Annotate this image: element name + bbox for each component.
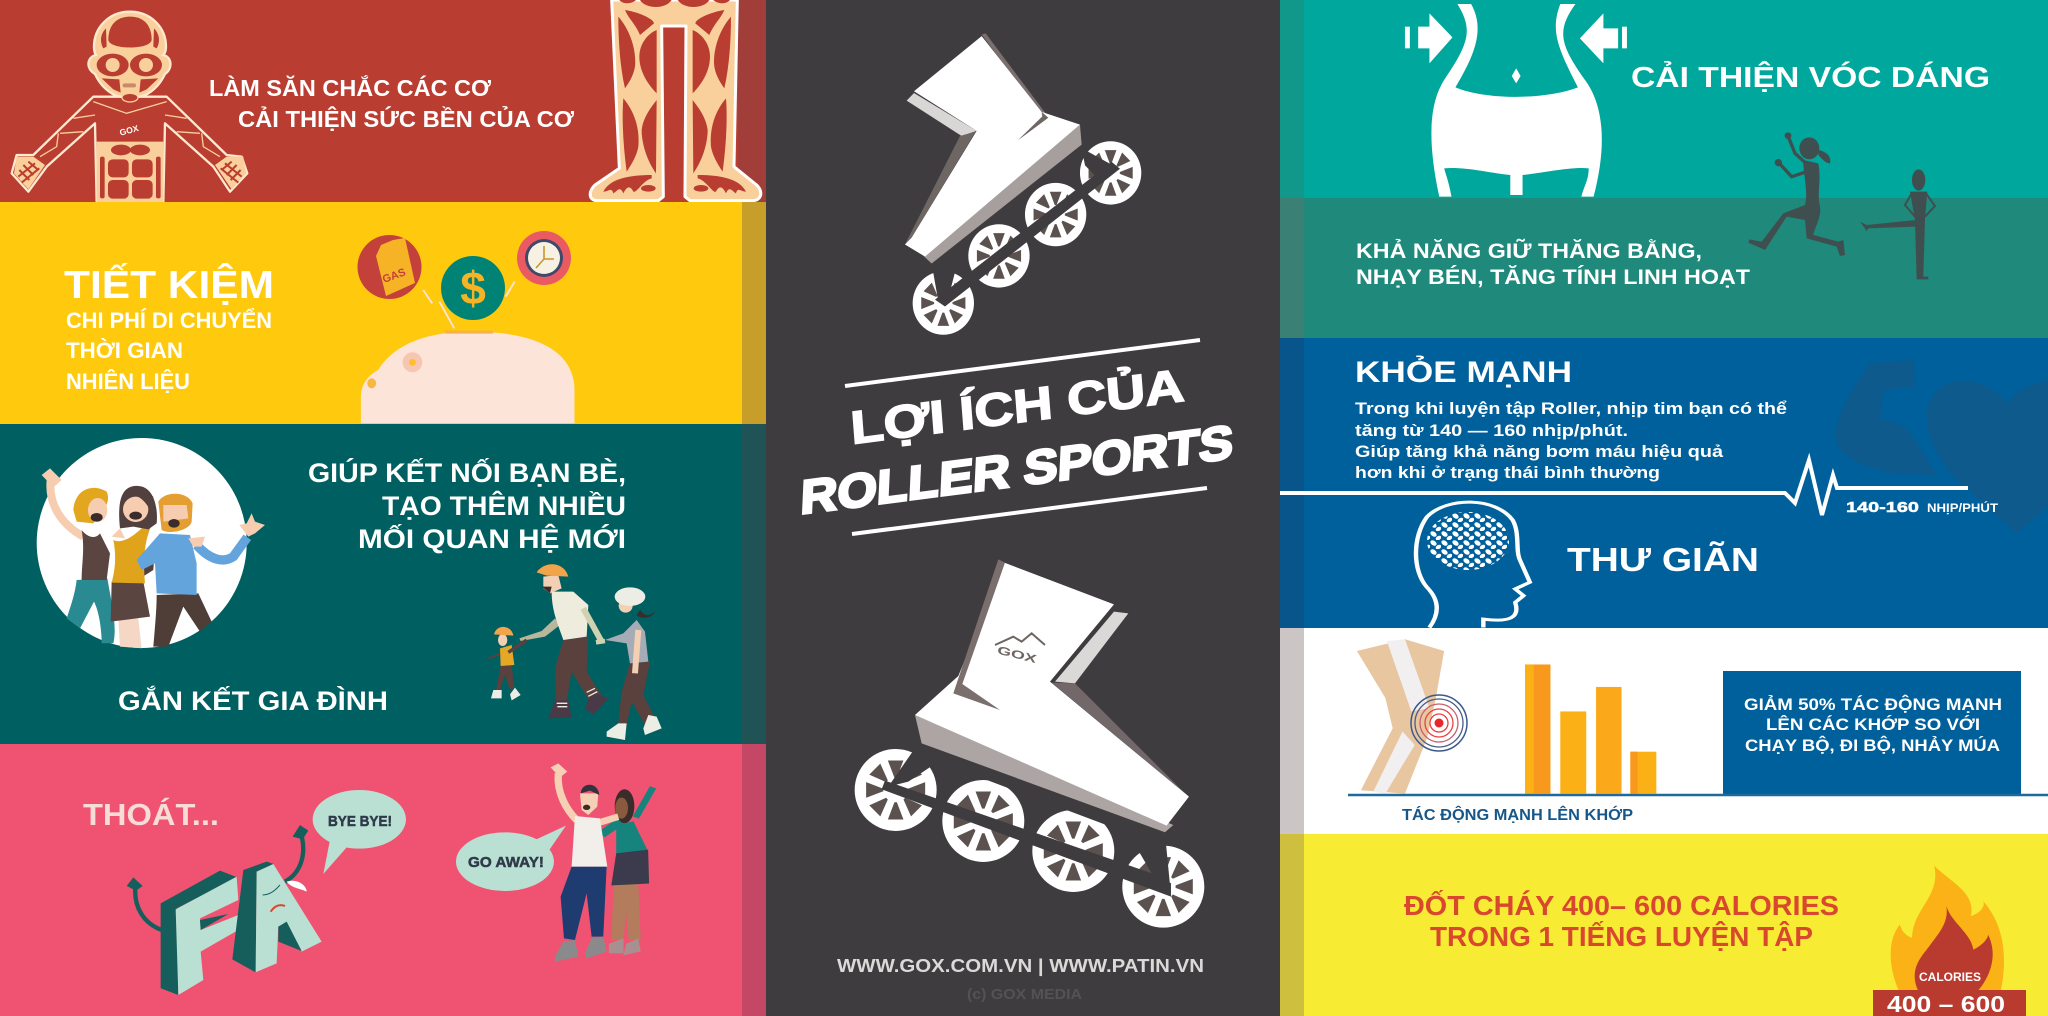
icon: bottom roller skate: GOX <box>996 645 1038 666</box>
text: muscle benefits: LÀM SĂN CHẮC CÁC CƠ <box>209 74 491 101</box>
text: heart rate label <box>1846 499 1999 516</box>
text: heart rate paragraph: Trong khi luyện tập Roller, nhịp tim bạn có thể <box>1355 399 1788 418</box>
heading: savings: TIẾT KIỆM <box>64 263 274 307</box>
text: heart rate label: 140-160 <box>1846 499 1919 516</box>
icon: muscular body figure <box>12 12 247 202</box>
icon: piggy bank <box>361 282 574 423</box>
text: balance <box>1356 239 1750 289</box>
icon: muscular body figure: GOX <box>118 123 140 138</box>
text: savings list: NHIÊN LIỆU <box>66 369 190 394</box>
icon: dollar coin: $ <box>460 262 486 314</box>
icon: exercising silhouettes <box>1748 132 1935 279</box>
text: calories burned <box>1404 889 1839 952</box>
icon: clock <box>517 231 571 285</box>
panel: title column (dark center) <box>766 0 1280 1016</box>
panel: health and relax (blue band) <box>1280 338 2048 628</box>
icon: waist with arrows <box>1405 4 1627 197</box>
panel: connecting people (dark teal band) <box>0 424 766 744</box>
text: savings list: CHI PHÍ DI CHUYỂN <box>66 308 272 333</box>
icon: gas can <box>358 235 422 299</box>
bar chart: impact <box>1525 664 1656 794</box>
text: heart rate paragraph <box>1355 399 1788 482</box>
icon: FA character <box>127 825 322 995</box>
callout: GO AWAY: GO AWAY! <box>468 854 544 871</box>
callout box: joint impact: GIẢM 50% TÁC ĐỘNG MẠNH <box>1744 695 2002 714</box>
callout: BYE BYE <box>313 790 406 874</box>
text: calories burned: ĐỐT CHÁY 400– 600 CALORIES <box>1404 889 1839 921</box>
heading: healthy: KHỎE MẠNH <box>1355 355 1572 389</box>
panel: body shape (teal band) <box>1280 0 2048 198</box>
heading: body shape: CẢI THIỆN VÓC DÁNG <box>1631 60 1990 94</box>
icon: brain <box>1427 512 1509 570</box>
text: savings list <box>66 308 272 394</box>
text: connect friends: TẠO THÊM NHIỀU <box>382 490 626 521</box>
heading: relax: THƯ GIÃN <box>1567 541 1759 578</box>
title decoration and heading <box>799 340 1234 534</box>
text: copyright: (c) GOX MEDIA <box>967 986 1082 1003</box>
panel: escape singledom (pink band) <box>0 744 766 1016</box>
text: muscle benefits <box>209 74 574 132</box>
callout: GO AWAY <box>456 826 566 891</box>
text: connect friends: GIÚP KẾT NỐI BẠN BÈ, <box>308 456 626 488</box>
panel: muscles (red band) <box>0 0 766 202</box>
icon: head with brain <box>1416 502 1530 628</box>
panel: calories (yellow band) <box>1280 834 2048 1016</box>
text: balance: KHẢ NĂNG GIỮ THĂNG BẰNG, <box>1356 239 1702 263</box>
text: family bonding: GẮN KẾT GIA ĐÌNH <box>118 685 388 716</box>
icon: friends in white circle <box>37 438 265 648</box>
text: connect friends: MỐI QUAN HỆ MỚI <box>358 522 626 554</box>
heading: escape: THOÁT... <box>83 797 219 832</box>
text: balance: NHẠY BÉN, TĂNG TÍNH LINH HOẠT <box>1356 266 1750 289</box>
callout box: joint impact <box>1723 671 2021 795</box>
panel: balance (dark teal-green band) <box>1280 198 2048 338</box>
text: websites: WWW.GOX.COM.VN | WWW.PATIN.VN <box>837 955 1204 976</box>
text: heart rate paragraph: tăng từ 140 — 160 nhịp/phút. <box>1355 421 1628 440</box>
text: heart rate paragraph: Giúp tăng khả năng bơm máu hiệu quả <box>1355 442 1724 461</box>
icon: dollar coin <box>441 256 505 320</box>
title decoration and heading: LỢI ÍCH CỦA <box>849 359 1186 454</box>
icon: ECG line <box>1280 460 1968 515</box>
icon: gas can: GAS <box>381 266 407 286</box>
callout: BYE BYE: BYE BYE! <box>328 813 392 830</box>
icon: bottom roller skate <box>855 559 1204 928</box>
text: connect friends <box>308 456 626 554</box>
icon: muscular legs <box>590 0 761 201</box>
text: muscle benefits: CẢI THIỆN SỨC BỀN CỦA CƠ <box>238 104 574 132</box>
icon: family on roller skates <box>488 564 662 740</box>
icon: top roller skate <box>905 33 1141 335</box>
text: chart caption: TÁC ĐỘNG MẠNH LÊN KHỚP <box>1402 805 1633 824</box>
text: savings list: THỜI GIAN <box>66 338 183 363</box>
title decoration and heading: ROLLER SPORTS <box>799 416 1234 525</box>
icon: couple skating <box>551 763 653 962</box>
icon: flame: CALORIES <box>1919 970 1981 984</box>
text: heart rate paragraph: hơn khi ở trạng thái bình thường <box>1355 463 1660 482</box>
icon: knee <box>1357 639 1467 794</box>
callout box: joint impact: LÊN CÁC KHỚP SO VỚI <box>1766 715 1980 734</box>
icon: muscle and heart silhouette <box>1836 360 2048 533</box>
text: heart rate label: NHỊP/PHÚT <box>1927 500 1999 515</box>
panel: joint impact (white band) <box>1280 628 2048 834</box>
callout box: joint impact: CHẠY BỘ, ĐI BỘ, NHẢY MÚA <box>1745 736 2000 755</box>
text: calories burned: TRONG 1 TIẾNG LUYỆN TẬP <box>1430 921 1813 952</box>
panel: savings (yellow band) <box>0 202 766 424</box>
icon: flame <box>1873 866 2026 1016</box>
